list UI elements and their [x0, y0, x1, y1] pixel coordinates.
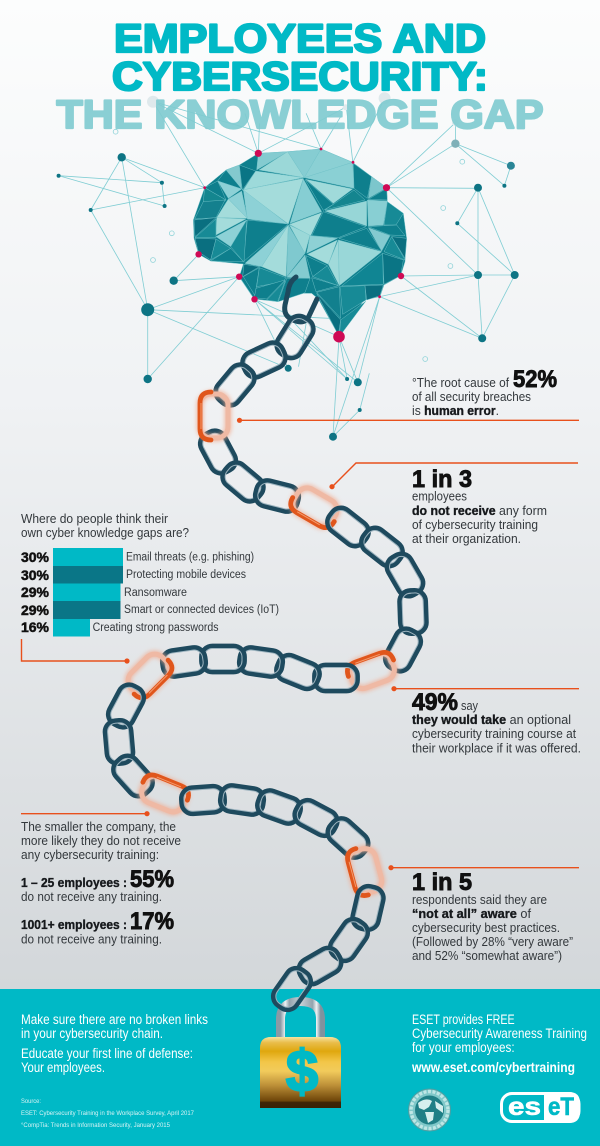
callout: company size	[21, 811, 181, 946]
panel: knowledge gaps bar chart: Ransomware	[124, 587, 187, 599]
panel: knowledge gaps bar chart	[21, 512, 279, 664]
callout: 1 in 5: cybersecurity best practices.	[412, 921, 560, 935]
title	[56, 17, 544, 137]
footer offer: ESET provides FREE	[412, 1012, 515, 1027]
callout: 49%	[391, 686, 581, 756]
padlock	[260, 1002, 341, 1108]
sources	[21, 1099, 195, 1129]
callout: 52% human error	[237, 366, 579, 423]
callout: 49%: their workplace if it was offered.	[412, 742, 581, 756]
sources: °CompTia: Trends in Information Security, January 2015	[21, 1123, 171, 1129]
brain illustration	[193, 149, 407, 337]
padlock: $	[286, 1039, 318, 1104]
panel: knowledge gaps bar chart: 30%	[21, 550, 49, 565]
callout: company size: more likely they do not receive	[21, 834, 181, 848]
callout: 52% human error: is human error.	[412, 404, 499, 418]
callout: company size: do not receive any training.	[21, 890, 162, 904]
panel: knowledge gaps bar chart: 29%	[21, 585, 49, 600]
footer offer: for your employees:	[412, 1040, 515, 1055]
callout: company size: do not receive any training.	[21, 932, 162, 946]
logo: ESET: eT	[548, 1093, 574, 1121]
sources: Source:	[21, 1099, 41, 1105]
footer message: in your cybersecurity chain.	[21, 1026, 163, 1041]
callout: 49%: they would take an optional	[412, 713, 571, 727]
callout: 49%: cybersecurity training course at	[412, 727, 576, 741]
red brain nodes	[195, 148, 404, 343]
logo: ESET: es	[508, 1093, 541, 1121]
callout: 1 in 3: do not receive any form	[412, 504, 547, 518]
footer message: Your employees.	[21, 1060, 105, 1075]
callout: 1 in 3: 1 in 3	[412, 466, 472, 493]
callout: 1 in 5: respondents said they are	[412, 893, 547, 907]
callout: 52% human error: of all security breaches	[412, 390, 531, 404]
panel: knowledge gaps bar chart: Where do people think their	[21, 512, 168, 526]
panel: knowledge gaps bar chart: own cyber knowledge gaps are?	[21, 526, 189, 540]
callout: 49%: 49%	[412, 689, 458, 716]
logo: ESET	[502, 1092, 580, 1123]
callout: 1 in 3	[329, 463, 578, 546]
panel: knowledge gaps bar chart: 30%	[21, 568, 49, 583]
title: THE KNOWLEDGE GAP	[56, 93, 544, 137]
panel: knowledge gaps bar chart: Protecting mobile devices	[126, 569, 246, 581]
footer message: Educate your first line of defense:	[21, 1046, 193, 1061]
footer offer: www.eset.com/cybertraining	[411, 1060, 575, 1075]
callout: company size: 1 – 25 employees :	[21, 876, 127, 890]
panel: knowledge gaps bar chart: 29%	[21, 603, 49, 618]
callout: 49%: say	[461, 699, 479, 713]
title: CYBERSECURITY:	[112, 55, 488, 99]
callout: company size: The smaller the company, the	[21, 820, 176, 834]
callout: company size: 17%	[130, 908, 174, 935]
panel: knowledge gaps bar chart: 16%	[21, 620, 49, 635]
footer message: Make sure there are no broken links	[21, 1012, 208, 1027]
callout: 1 in 3: employees	[412, 490, 467, 504]
callout: 1 in 3: at their organization.	[412, 532, 521, 546]
title: EMPLOYEES AND	[114, 17, 486, 61]
callout: company size: 1001+ employees :	[21, 918, 127, 932]
footer message	[21, 1012, 208, 1075]
footer band	[0, 989, 600, 1146]
sources: ESET: Cybersecurity Training in the Workplace Survey, April 2017	[21, 1111, 195, 1117]
callout: 1 in 5: and 52% “somewhat aware”)	[412, 949, 562, 963]
callout: 52% human error: °The root cause of	[412, 376, 509, 390]
callout: 1 in 5: “not at all” aware of	[412, 907, 532, 921]
icon: globe badge	[408, 1089, 450, 1131]
callout: 1 in 3: of cybersecurity training	[412, 518, 538, 532]
chain	[104, 277, 427, 1014]
panel: knowledge gaps bar chart: Email threats (e.g. phishing)	[126, 552, 254, 564]
callout: company size: 55%	[130, 866, 174, 893]
callout: 52% human error: 52%	[513, 366, 557, 393]
footer offer	[411, 1012, 587, 1075]
panel: knowledge gaps bar chart: Creating strong passwords	[93, 622, 219, 634]
panel: knowledge gaps bar chart: Smart or connected devices (IoT)	[124, 604, 279, 616]
callout: 1 in 5: (Followed by 28% “very aware”	[412, 935, 573, 949]
callout: company size: any cybersecurity training:	[21, 848, 159, 862]
callout: 1 in 5	[388, 865, 579, 963]
network of nodes and lines	[57, 92, 519, 441]
callout: 1 in 5: 1 in 5	[412, 869, 472, 896]
